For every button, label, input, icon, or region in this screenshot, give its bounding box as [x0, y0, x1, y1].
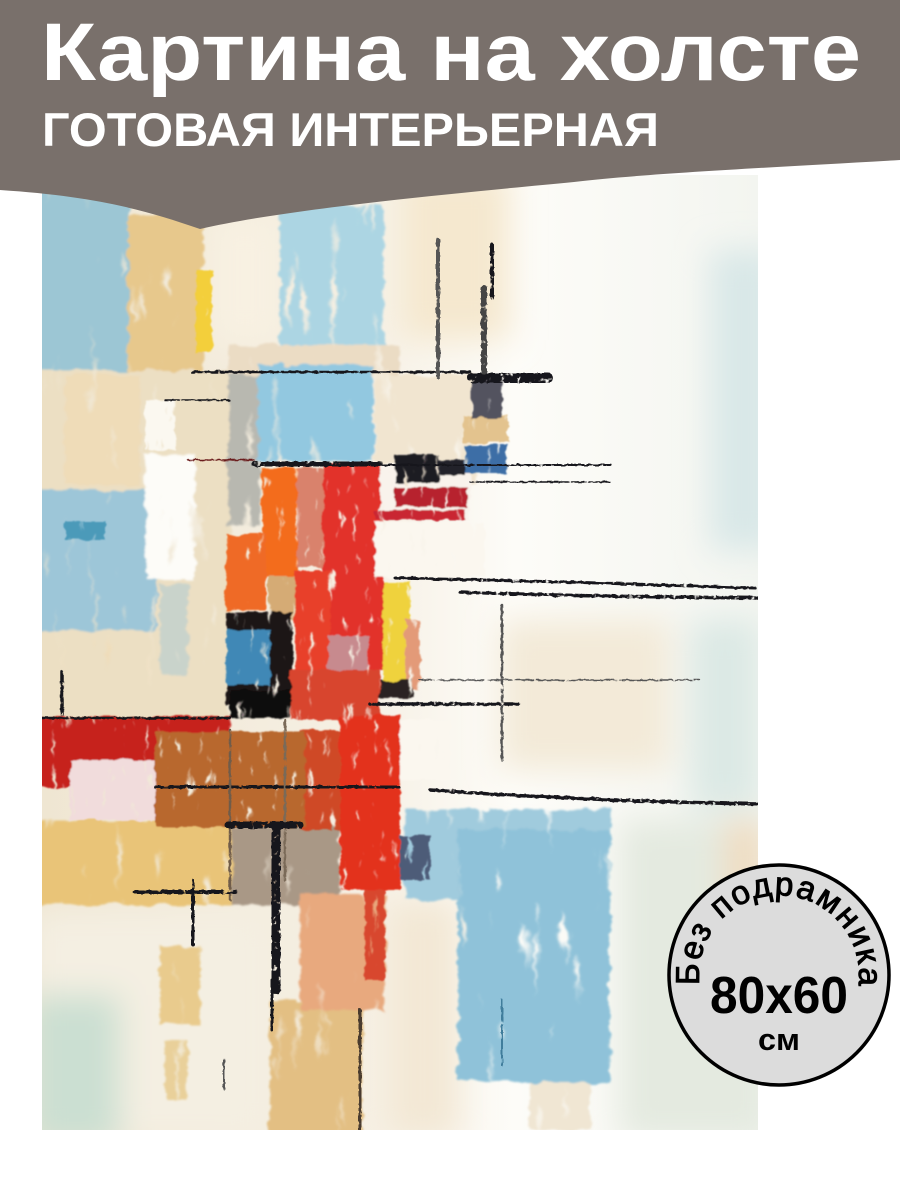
title: Картина на холсте	[41, 7, 861, 98]
subtitle: ГОТОВАЯ ИНТЕРЬЕРНАЯ	[42, 103, 659, 156]
abstract painting on canvas	[30, 170, 780, 1145]
badge unit: см	[758, 1022, 800, 1057]
saturated paint blocks	[35, 270, 508, 980]
broad paint blocks	[35, 190, 610, 1135]
badge: size without stretcher	[667, 863, 891, 1087]
badge curved label: Без подрамника	[676, 877, 878, 986]
black scratch lines	[42, 240, 758, 1130]
header banner	[0, 0, 900, 229]
badge size: 80x60	[710, 967, 848, 1025]
